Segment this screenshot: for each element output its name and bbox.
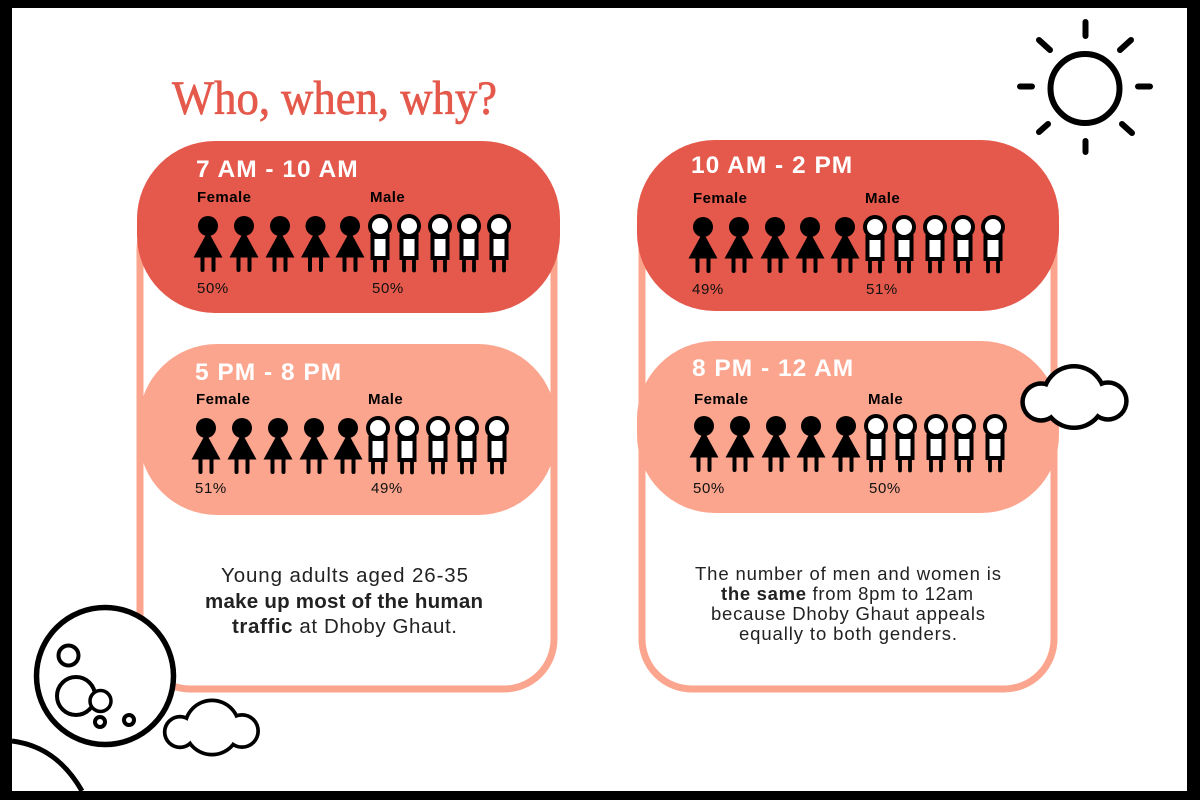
panel: right column outline xyxy=(642,200,1054,689)
panel: 10 AM - 2 PM: 10 AM - 2 PM xyxy=(691,152,853,179)
title: Who, when, why? xyxy=(172,73,497,125)
text block: same numbers xyxy=(695,563,1001,644)
text block: same numbers: the same from 8pm to 12am xyxy=(721,583,973,604)
panel: 7 AM - 10 AM: 50% xyxy=(197,280,229,297)
panel: 5 PM - 8 PM xyxy=(139,344,556,515)
icon: planet arc bottom left xyxy=(12,741,82,791)
panel: 8 PM - 12 AM: Male xyxy=(868,391,903,408)
panel: 8 PM - 12 AM: 50% xyxy=(693,480,725,497)
icon: sun xyxy=(1020,22,1150,152)
icon: moon with craters xyxy=(36,608,174,744)
icon: cloud right xyxy=(1020,364,1129,430)
text block: same numbers: because Dhoby Ghaut appeals xyxy=(711,603,985,624)
panel: 7 AM - 10 AM xyxy=(137,141,560,313)
panel: 5 PM - 8 PM: 51% xyxy=(195,480,227,497)
panel: left column outline xyxy=(140,200,554,689)
panel: 8 PM - 12 AM xyxy=(637,341,1059,513)
panel: 10 AM - 2 PM: 51% xyxy=(866,281,898,298)
panel: 8 PM - 12 AM: 8 PM - 12 AM xyxy=(692,355,854,382)
icon: cloud bottom left xyxy=(163,698,260,756)
text block: young adults: traffic at Dhoby Ghaut. xyxy=(232,615,457,638)
panel: 10 AM - 2 PM: Female xyxy=(693,190,747,207)
panel: 5 PM - 8 PM: 5 PM - 8 PM xyxy=(195,359,342,386)
panel: 5 PM - 8 PM: 49% xyxy=(371,480,403,497)
text block: same numbers: The number of men and women is xyxy=(695,563,1001,584)
panel: 5 PM - 8 PM: Female xyxy=(196,391,250,408)
panel: 10 AM - 2 PM xyxy=(637,140,1059,311)
panel: 7 AM - 10 AM: 7 AM - 10 AM xyxy=(196,156,359,183)
panel: 8 PM - 12 AM: Female xyxy=(694,391,748,408)
text block: young adults: Young adults aged 26-35 xyxy=(221,564,468,587)
panel: 7 AM - 10 AM: Male xyxy=(370,189,405,206)
panel: 8 PM - 12 AM: 50% xyxy=(869,480,901,497)
panel: 5 PM - 8 PM: Male xyxy=(368,391,403,408)
panel: 10 AM - 2 PM: Male xyxy=(865,190,900,207)
text block: same numbers: equally to both genders. xyxy=(739,623,957,644)
panel: 7 AM - 10 AM: Female xyxy=(197,189,251,206)
panel: 10 AM - 2 PM: 49% xyxy=(692,281,724,298)
text block: young adults: make up most of the human xyxy=(205,590,483,613)
panel: 7 AM - 10 AM: 50% xyxy=(372,280,404,297)
text block: young adults xyxy=(205,564,483,638)
